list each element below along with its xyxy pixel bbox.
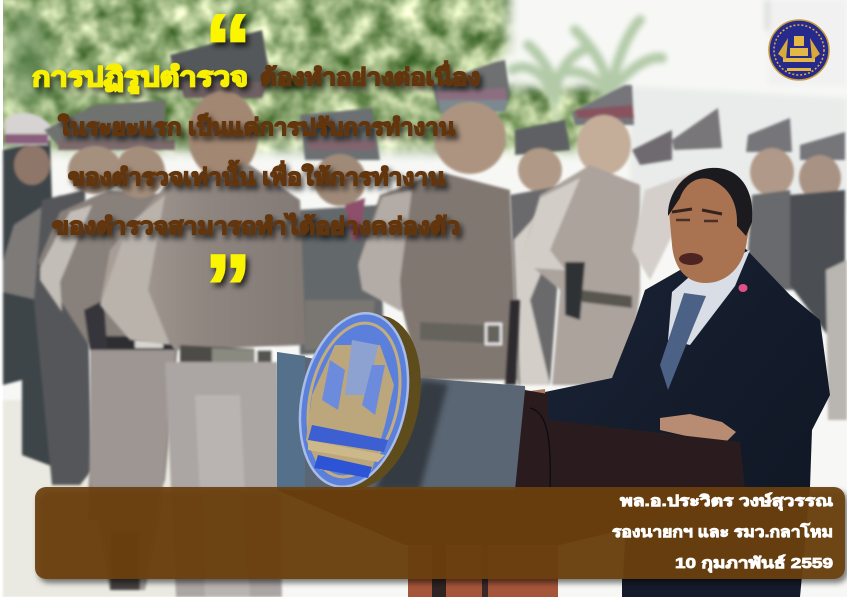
date: 10 กุมภาพันธ์ 2559 [675, 554, 833, 573]
officer centre-right [358, 60, 520, 385]
podium: grey-blue lectern top [277, 352, 530, 490]
left officer [38, 146, 178, 590]
logo: ministry seal [769, 20, 829, 80]
necktie [660, 293, 706, 390]
jacket [545, 248, 830, 597]
dark wooden lectern [515, 390, 745, 490]
lapel pin [738, 284, 748, 292]
building [630, 0, 847, 210]
emblem on the podium [285, 303, 436, 499]
right hand [660, 414, 736, 442]
quote line 1: ต้องทำอย่างต่อเนื่อง [260, 60, 480, 90]
ground [3, 400, 273, 597]
speaker: General Prawit [530, 168, 830, 597]
quote line 4: ของตำรวจสามารถทำได้อย่างคล่องตัว [52, 212, 460, 239]
left hand [530, 389, 546, 410]
right-hand dark officers [632, 108, 847, 420]
eyebrows, eyes and mouth [672, 209, 722, 214]
quote line 1 highlighted lead: การปฏิรูปตำรวจ [32, 62, 248, 94]
officer right of centre [522, 85, 640, 385]
head [670, 168, 752, 283]
back officers between the central figures [298, 108, 575, 385]
lectern base below the banner [277, 490, 800, 597]
shirt collar [668, 250, 750, 345]
speaker position: รองนายกฯ และ รมว.กลาโหม [612, 522, 833, 541]
speaker name: พล.อ.ประวิตร วงษ์สุวรรณ [620, 492, 833, 511]
palm trees [512, 20, 662, 120]
quote line 3: ของตำรวจเท่านั้น เพื่อให้การทำงาน [68, 160, 445, 190]
quote line 2: ในระยะแรก เป็นแค่การปรับการทำงาน [58, 112, 455, 140]
quotation block [32, 0, 480, 341]
caption banner [35, 487, 845, 579]
central officer [100, 30, 306, 597]
closing quotation mark: ” [204, 235, 252, 341]
trees behind the officers [0, 0, 610, 160]
far-left dark officers [3, 100, 175, 485]
hair [668, 168, 752, 236]
